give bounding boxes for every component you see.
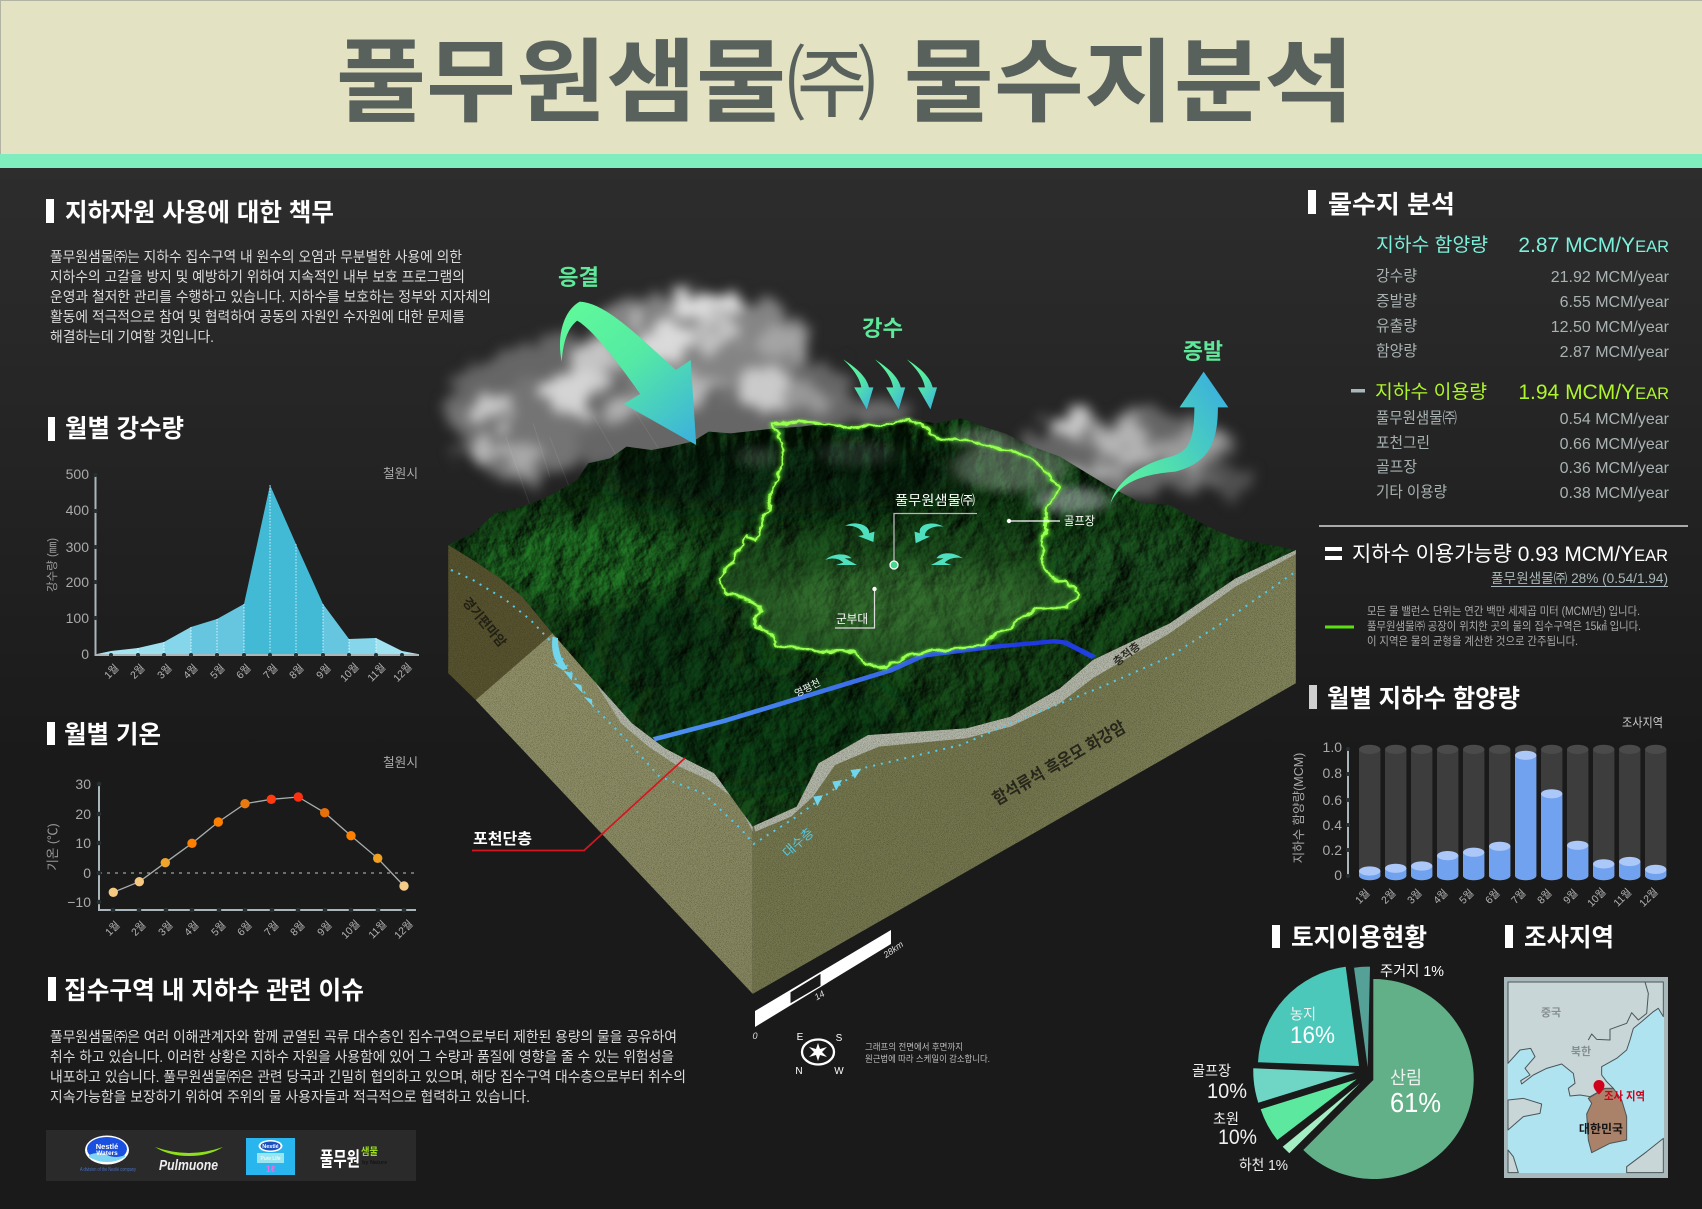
recharge block: 2.87 MCM/year: [1560, 344, 1670, 361]
recharge block: 21.92 MCM/year: [1551, 269, 1670, 286]
cylinder chart: 4월: [1431, 887, 1451, 907]
title: 풀무원샘물 ㈜ 물수지분석: [336, 33, 1354, 134]
area chart: precipitation: 강수량 (㎜): [46, 538, 59, 592]
recharge block: 12.50 MCM/year: [1551, 319, 1670, 336]
pie chart: 61%: [1390, 1087, 1441, 1118]
panel: monthly groundwater recharge: [1292, 685, 1666, 910]
cylinder chart: 8월: [1535, 887, 1555, 907]
logo: Pulmuone: [155, 1147, 223, 1174]
map: [1504, 977, 1668, 1178]
area chart: precipitation: 9월: [314, 662, 334, 682]
clouds behind terrain: [445, 292, 1249, 496]
logo: Nestle Waters: [80, 1136, 136, 1173]
panel: monthly temperature: [46, 721, 418, 942]
pie chart: [1192, 963, 1474, 1179]
pie chart: 골프장: [1192, 1063, 1231, 1080]
pie chart: 주거지 1%: [1380, 963, 1444, 980]
logo: Nestle Waters: Nestlé: [96, 1142, 118, 1151]
cylinder chart: 12월: [1637, 886, 1661, 910]
scale bar: 14: [813, 989, 826, 1002]
usage block: 0.36 MCM/year: [1560, 460, 1670, 477]
terrain block diagram: [440, 265, 1300, 994]
scale bar: [752, 930, 906, 1041]
line chart: temperature: −10: [67, 894, 91, 910]
logo: Pulmuone Spring Water: 풀무원: [320, 1148, 360, 1171]
text block: responsibility: 풀무원샘물㈜는 지하수 집수구역 내 원수의 오염과 무분별한 사용에 의한: [50, 249, 462, 266]
text block: groundwater issues: 취수 하고 있습니다. 이러한 상황은 지하수 자원을 사용함에 있어 그 수량과 품질에 영향을 줄 수 있는 위험성을: [50, 1049, 674, 1066]
pie chart: 농지: [1290, 1006, 1316, 1023]
label: aquifer: 대수층: [780, 825, 816, 860]
cylinder chart: 6월: [1483, 887, 1503, 907]
river: Yeongpyeongcheon: [654, 641, 1094, 739]
arrows: aquifer flow: [552, 637, 861, 806]
scale bar: 0: [752, 1031, 758, 1041]
area chart: precipitation: 100: [66, 610, 89, 626]
line chart: temperature: 11월: [366, 918, 389, 941]
area chart: precipitation: 11월: [365, 661, 388, 684]
area chart: precipitation: 철원시: [383, 466, 418, 481]
heading: monthly precipitation: 월별 강수량: [65, 415, 184, 443]
label: evaporation: 증발: [1183, 339, 1223, 364]
panel: study area: [1504, 924, 1668, 1178]
panel: monthly groundwater recharge: 조사지역: [1622, 716, 1663, 730]
lower background gradient: [0, 168, 1702, 760]
legend note: 이 지역은 물의 균형을 계산한 것으로 간주됩니다.: [1367, 635, 1578, 648]
area chart: precipitation: 400: [66, 502, 89, 518]
line chart: temperature: 1월: [103, 919, 123, 939]
usage block: 기타 이용량: [1376, 483, 1447, 501]
legend note: [1325, 605, 1641, 648]
panel: responsibility for groundwater use: [46, 199, 491, 346]
usage block: 골프장: [1376, 458, 1417, 476]
line chart: temperature: [46, 755, 418, 942]
pie chart: 16%: [1290, 1022, 1335, 1049]
arrows: precipitation: [843, 359, 937, 409]
cylinder chart: 11월: [1611, 886, 1634, 909]
recharge block: 증발량: [1376, 292, 1417, 310]
cylinder chart: [1292, 739, 1666, 910]
line chart: temperature: 2월: [129, 919, 149, 939]
cylinder chart: 2월: [1379, 887, 1399, 907]
dotted aquifer flow line: [451, 570, 1293, 844]
cylinder chart: 7월: [1509, 887, 1529, 907]
logo strip: [46, 1130, 416, 1181]
area chart: precipitation: 6월: [234, 662, 254, 682]
logo: Nestle Waters: A division of the Nestlé company: [80, 1167, 136, 1173]
text block: groundwater issues: 지속가능함을 보장하기 위하여 주위의 물 사용자들과 적극적으로 협력하고 있습니다.: [50, 1089, 530, 1106]
icon: compass: W: [834, 1066, 844, 1077]
callout: plant location: 풀무원샘물㈜: [895, 493, 976, 508]
label: river name: 영평천: [793, 677, 823, 700]
cylinder chart: 10월: [1585, 886, 1609, 910]
line chart: temperature: 12월: [392, 918, 416, 942]
rain streaks: [506, 407, 698, 507]
logo: Pulmuone Spring Water: by Nature: [362, 1160, 387, 1166]
icon: compass: N: [795, 1066, 803, 1077]
heading: land use: 토지이용현황: [1291, 924, 1427, 952]
label: alluvium: 충적층: [1111, 640, 1143, 669]
recharge block: 유출량: [1376, 317, 1417, 335]
callout: Pocheon fault: [472, 758, 685, 850]
line chart: temperature: 3월: [156, 919, 176, 939]
arrow: evaporation: [1110, 372, 1228, 504]
icon: compass: [795, 1032, 844, 1077]
callout: golf course: 골프장: [1064, 514, 1095, 528]
heading: responsibility: 지하자원 사용에 대한 책무: [65, 199, 334, 227]
logo: Pure Life: Pure Life: [260, 1156, 281, 1162]
note: perspective scale: 그래프의 전면에서 후면까지: [865, 1042, 963, 1052]
heading: groundwater issues: 집수구역 내 지하수 관련 이슈: [64, 977, 364, 1005]
text block: responsibility: [50, 249, 491, 346]
legend note: 모든 물 밸런스 단위는 연간 백만 세제곱 미터 (MCM/년) 입니다.: [1367, 605, 1640, 618]
logo: Pure Life: [246, 1138, 295, 1175]
area chart: precipitation: 2월: [128, 662, 148, 682]
label: condensation: 응결: [558, 265, 599, 290]
callout: military base: 군부대: [836, 612, 868, 626]
cylinder chart: 0.6: [1323, 792, 1342, 808]
text block: responsibility: 활동에 적극적으로 참여 및 협력하여 공동의 자원인 수자원에 대한 문제를: [50, 309, 465, 326]
line chart: temperature: 30: [75, 776, 91, 792]
text block: responsibility: 해결하는데 기여할 것입니다.: [50, 329, 214, 346]
usage block: 포천그린: [1376, 434, 1430, 452]
panel: groundwater issues: [48, 977, 686, 1106]
usage block: 1.94 MCM/YEAR: [1518, 381, 1669, 404]
recharge block: 강수량: [1376, 267, 1417, 285]
line chart: temperature: 6월: [235, 919, 255, 939]
pie chart: 하천 1%: [1239, 1157, 1288, 1174]
text block: responsibility: 지하수의 고갈을 방지 및 예방하기 위하여 지속적인 내부 보호 프로그램의: [50, 269, 465, 286]
area chart: precipitation: 10월: [338, 661, 362, 685]
line chart: temperature: 10: [75, 835, 91, 851]
terrain surface: [440, 410, 1300, 833]
area chart: precipitation: 0: [81, 646, 89, 662]
label: gneiss: 경기편마암: [459, 594, 509, 650]
usage block: 0.38 MCM/year: [1560, 485, 1670, 502]
arrow: condensation: [560, 302, 696, 445]
area chart: precipitation: 5월: [208, 662, 228, 682]
map: 중국: [1541, 1006, 1561, 1019]
cylinder chart: 9월: [1561, 887, 1581, 907]
callout: military base: [835, 587, 877, 628]
recharge block: 지하수 함양량: [1376, 234, 1488, 256]
heading: study area: 조사지역: [1524, 924, 1614, 952]
panel: water balance analysis: [1308, 190, 1688, 648]
cylinder chart: 지하수 함양량(MCM): [1292, 753, 1306, 863]
icon: location pin: [1594, 1080, 1604, 1094]
heading: water balance: 물수지 분석: [1328, 191, 1455, 219]
usage block: 지하수 이용량: [1375, 381, 1487, 403]
pie chart: 10%: [1207, 1080, 1247, 1103]
cylinder chart: 1.0: [1323, 739, 1342, 755]
icon: compass: S: [836, 1033, 843, 1044]
callout: golf course: [1007, 514, 1095, 528]
callout: plant location: [890, 493, 977, 569]
line chart: temperature: 8월: [288, 919, 308, 939]
panel: land use: [1192, 924, 1474, 1179]
right face: [753, 550, 1296, 994]
cylinder chart: 5월: [1457, 887, 1477, 907]
heading: monthly temperature: 월별 기온: [64, 721, 161, 749]
heading: monthly recharge: 월별 지하수 함양량: [1327, 685, 1520, 713]
note: perspective scale: [865, 1042, 990, 1064]
recharge block: 2.87 MCM/YEAR: [1518, 234, 1669, 257]
note: perspective scale: 원근법에 따라 스케일이 감소합니다.: [865, 1053, 990, 1064]
usage block: 0.66 MCM/year: [1560, 436, 1670, 453]
left face: [476, 633, 753, 994]
text block: groundwater issues: 풀무원샘물㈜은 여러 이해관계자와 함께 균열된 곡류 대수층인 집수구역으로부터 제한된 용량의 물을 공유하여: [50, 1029, 677, 1046]
legend note: 풀무원샘물㈜ 공장이 위치한 곳의 물의 집수구역은 15㎢ 입니다.: [1367, 619, 1641, 633]
callout: Pocheon fault: 포천단층: [473, 830, 532, 848]
header banner: [0, 0, 1702, 168]
usage block: 풀무원샘물㈜: [1376, 409, 1457, 427]
line chart: temperature: 5월: [209, 919, 229, 939]
arrows: inflow to plant: [825, 523, 963, 565]
line chart: temperature: 기온 (℃): [46, 823, 60, 871]
text block: groundwater issues: 내포하고 있습니다. 풀무원샘물㈜은 관련 당국과 긴밀히 협의하고 있으며, 해당 집수구역 대수층으로부터 취수의: [50, 1069, 686, 1086]
line chart: temperature: 7월: [262, 919, 282, 939]
area chart: precipitation: 12월: [391, 661, 415, 685]
map: 조사 지역: [1604, 1090, 1645, 1103]
cylinder chart: 0.4: [1323, 817, 1342, 833]
usage block: 0.54 MCM/year: [1560, 411, 1670, 428]
panel: monthly precipitation: [46, 415, 419, 685]
recharge block: [1376, 234, 1670, 361]
line chart: temperature: 9월: [315, 919, 335, 939]
area chart: precipitation: 7월: [261, 662, 281, 682]
cylinder chart: 1월: [1353, 887, 1373, 907]
cylinder chart: 0: [1334, 867, 1342, 883]
area chart: precipitation: 300: [66, 539, 89, 555]
icon: compass: E: [797, 1032, 804, 1043]
left dark rock face: [448, 545, 552, 700]
area chart: precipitation: [46, 466, 419, 685]
available groundwater total: [1325, 543, 1668, 587]
area chart: precipitation: 200: [66, 574, 89, 590]
area chart: precipitation: 500: [66, 466, 89, 482]
map: 대한민국: [1579, 1121, 1623, 1136]
area chart: precipitation: 3월: [155, 662, 175, 682]
recharge block: 함양량: [1376, 342, 1417, 360]
area chart: precipitation: 4월: [181, 662, 201, 682]
alluvium band: [594, 550, 1296, 832]
area chart: precipitation: 8월: [287, 662, 307, 682]
usage block: [1351, 381, 1670, 502]
line chart: temperature: 20: [75, 806, 91, 822]
cylinder chart: 0.2: [1323, 842, 1342, 858]
recharge block: 6.55 MCM/year: [1560, 294, 1670, 311]
area chart: precipitation: 1월: [102, 662, 122, 682]
logo: Pulmuone Spring Water: 샘물: [361, 1145, 378, 1158]
label: granite: 함석류석 흑운모 화강암: [990, 717, 1129, 809]
line chart: temperature: 철원시: [383, 755, 418, 770]
line chart: temperature: 10월: [339, 918, 363, 942]
text block: responsibility: 운영과 철저한 관리를 수행하고 있습니다. 지하수를 보호하는 정부와 지자체의: [50, 289, 491, 306]
cylinder chart: 0.8: [1323, 765, 1342, 781]
pie chart: 산림: [1390, 1068, 1422, 1088]
text block: groundwater issues: [50, 1029, 686, 1106]
logo: Pure Life: 1ℓ: [266, 1164, 276, 1174]
cylinder chart: 3월: [1405, 887, 1425, 907]
label: precipitation: 강수: [862, 316, 903, 341]
pie chart: 10%: [1218, 1126, 1257, 1149]
available groundwater total: 지하수 이용가능량 0.93 MCM/YEAR: [1352, 543, 1668, 566]
available groundwater total: 풀무원샘물㈜ 28% (0.54/1.94): [1491, 571, 1668, 586]
line chart: temperature: 0: [83, 865, 91, 881]
pie chart: 초원: [1213, 1111, 1239, 1128]
catchment boundary: [719, 418, 1079, 668]
logo: Nestle Waters: Waters: [96, 1150, 118, 1157]
logo: Pure Life: Nestlé: [262, 1144, 279, 1150]
line chart: temperature: 4월: [182, 919, 202, 939]
logo: Pulmuone: Pulmuone: [159, 1157, 218, 1174]
map: 북한: [1571, 1044, 1591, 1058]
scale bar: 28km: [881, 939, 906, 961]
logo: Pulmuone Spring Water: [320, 1145, 387, 1171]
